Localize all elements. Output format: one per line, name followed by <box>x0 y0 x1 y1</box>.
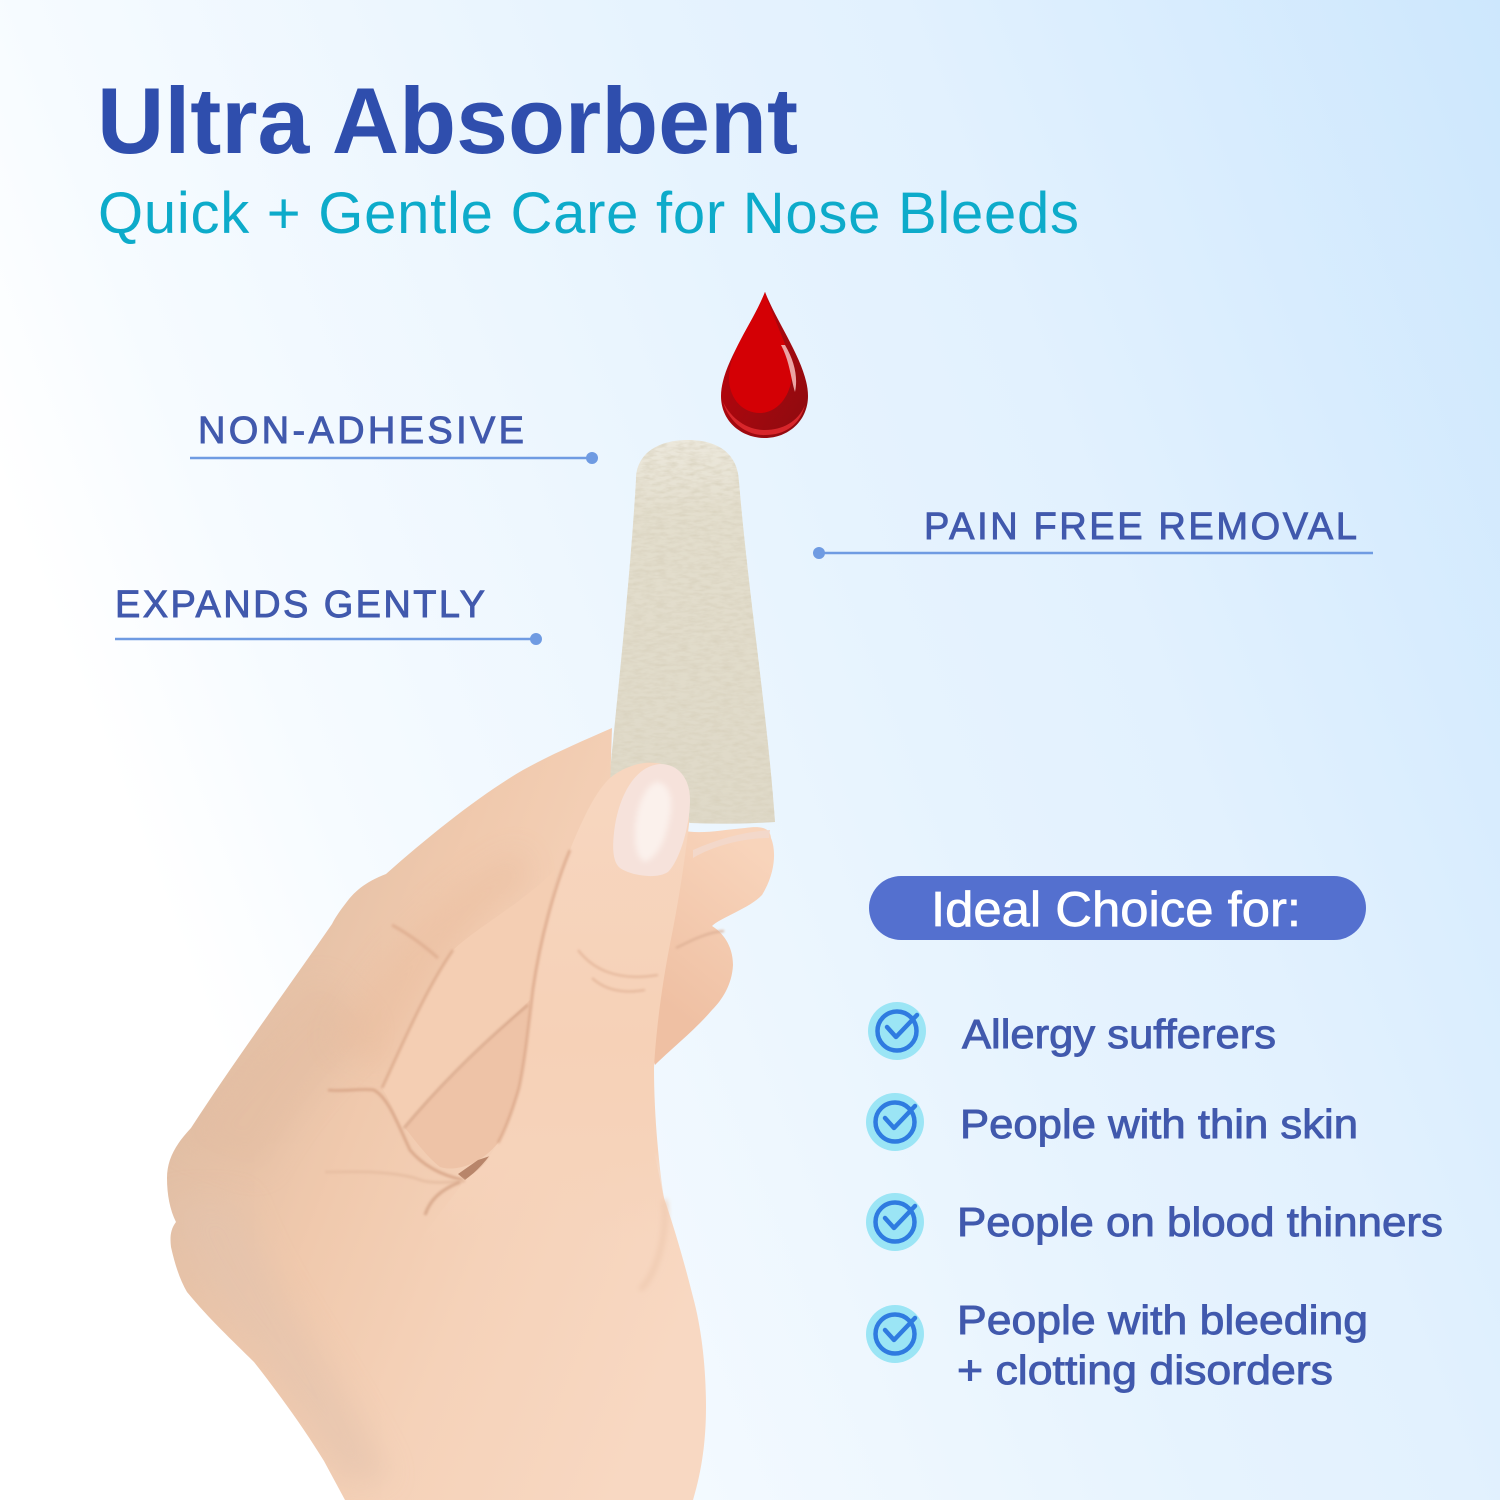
inner gap shadow <box>405 1000 530 1169</box>
palm and index finger <box>167 728 706 1500</box>
blood drop icon <box>721 292 808 438</box>
callout: non-adhesive: NON-ADHESIVE <box>198 410 524 452</box>
checklist item: bleeding and clotting disorders <box>866 1297 1368 1393</box>
checklist item: thin skin <box>866 1093 1358 1151</box>
callout: expands gently: EXPANDS GENTLY <box>115 584 485 626</box>
callout: pain free removal: PAIN FREE REMOVAL <box>924 506 1357 548</box>
thumb left edge shadow <box>498 850 570 1143</box>
checklist item: blood thinners <box>866 1193 1443 1251</box>
checklist item: thin skin: People with thin skin <box>960 1101 1358 1147</box>
callout: non-adhesive <box>190 410 598 464</box>
checklist item: bleeding and clotting disorders: People with bleeding <box>957 1297 1368 1343</box>
middle finger segment <box>382 869 556 1128</box>
checklist item: allergy sufferers <box>868 1002 1276 1060</box>
palm fold creases <box>328 1089 463 1180</box>
title: Ultra Absorbent <box>97 68 798 173</box>
callout: expands gently <box>115 584 542 645</box>
checklist item: bleeding and clotting disorders: + clotting disorders <box>957 1347 1333 1393</box>
thumbnail <box>613 764 690 876</box>
callout: pain free removal <box>813 506 1373 559</box>
pill heading: ideal choice for: Ideal Choice for: <box>931 883 1301 937</box>
pill heading: ideal choice for <box>869 876 1366 940</box>
checklist item: blood thinners: People on blood thinners <box>957 1199 1443 1245</box>
thumb <box>420 763 689 1240</box>
back fingers <box>620 827 774 1065</box>
hand holding nasal pad <box>167 440 775 1500</box>
checklist item: allergy sufferers: Allergy sufferers <box>962 1011 1276 1057</box>
nasal pad <box>609 440 775 824</box>
wrist and knuckle shading <box>172 850 530 1480</box>
subtitle: Quick + Gentle Care for Nose Bleeds <box>98 181 1079 246</box>
knuckle creases <box>578 950 658 992</box>
